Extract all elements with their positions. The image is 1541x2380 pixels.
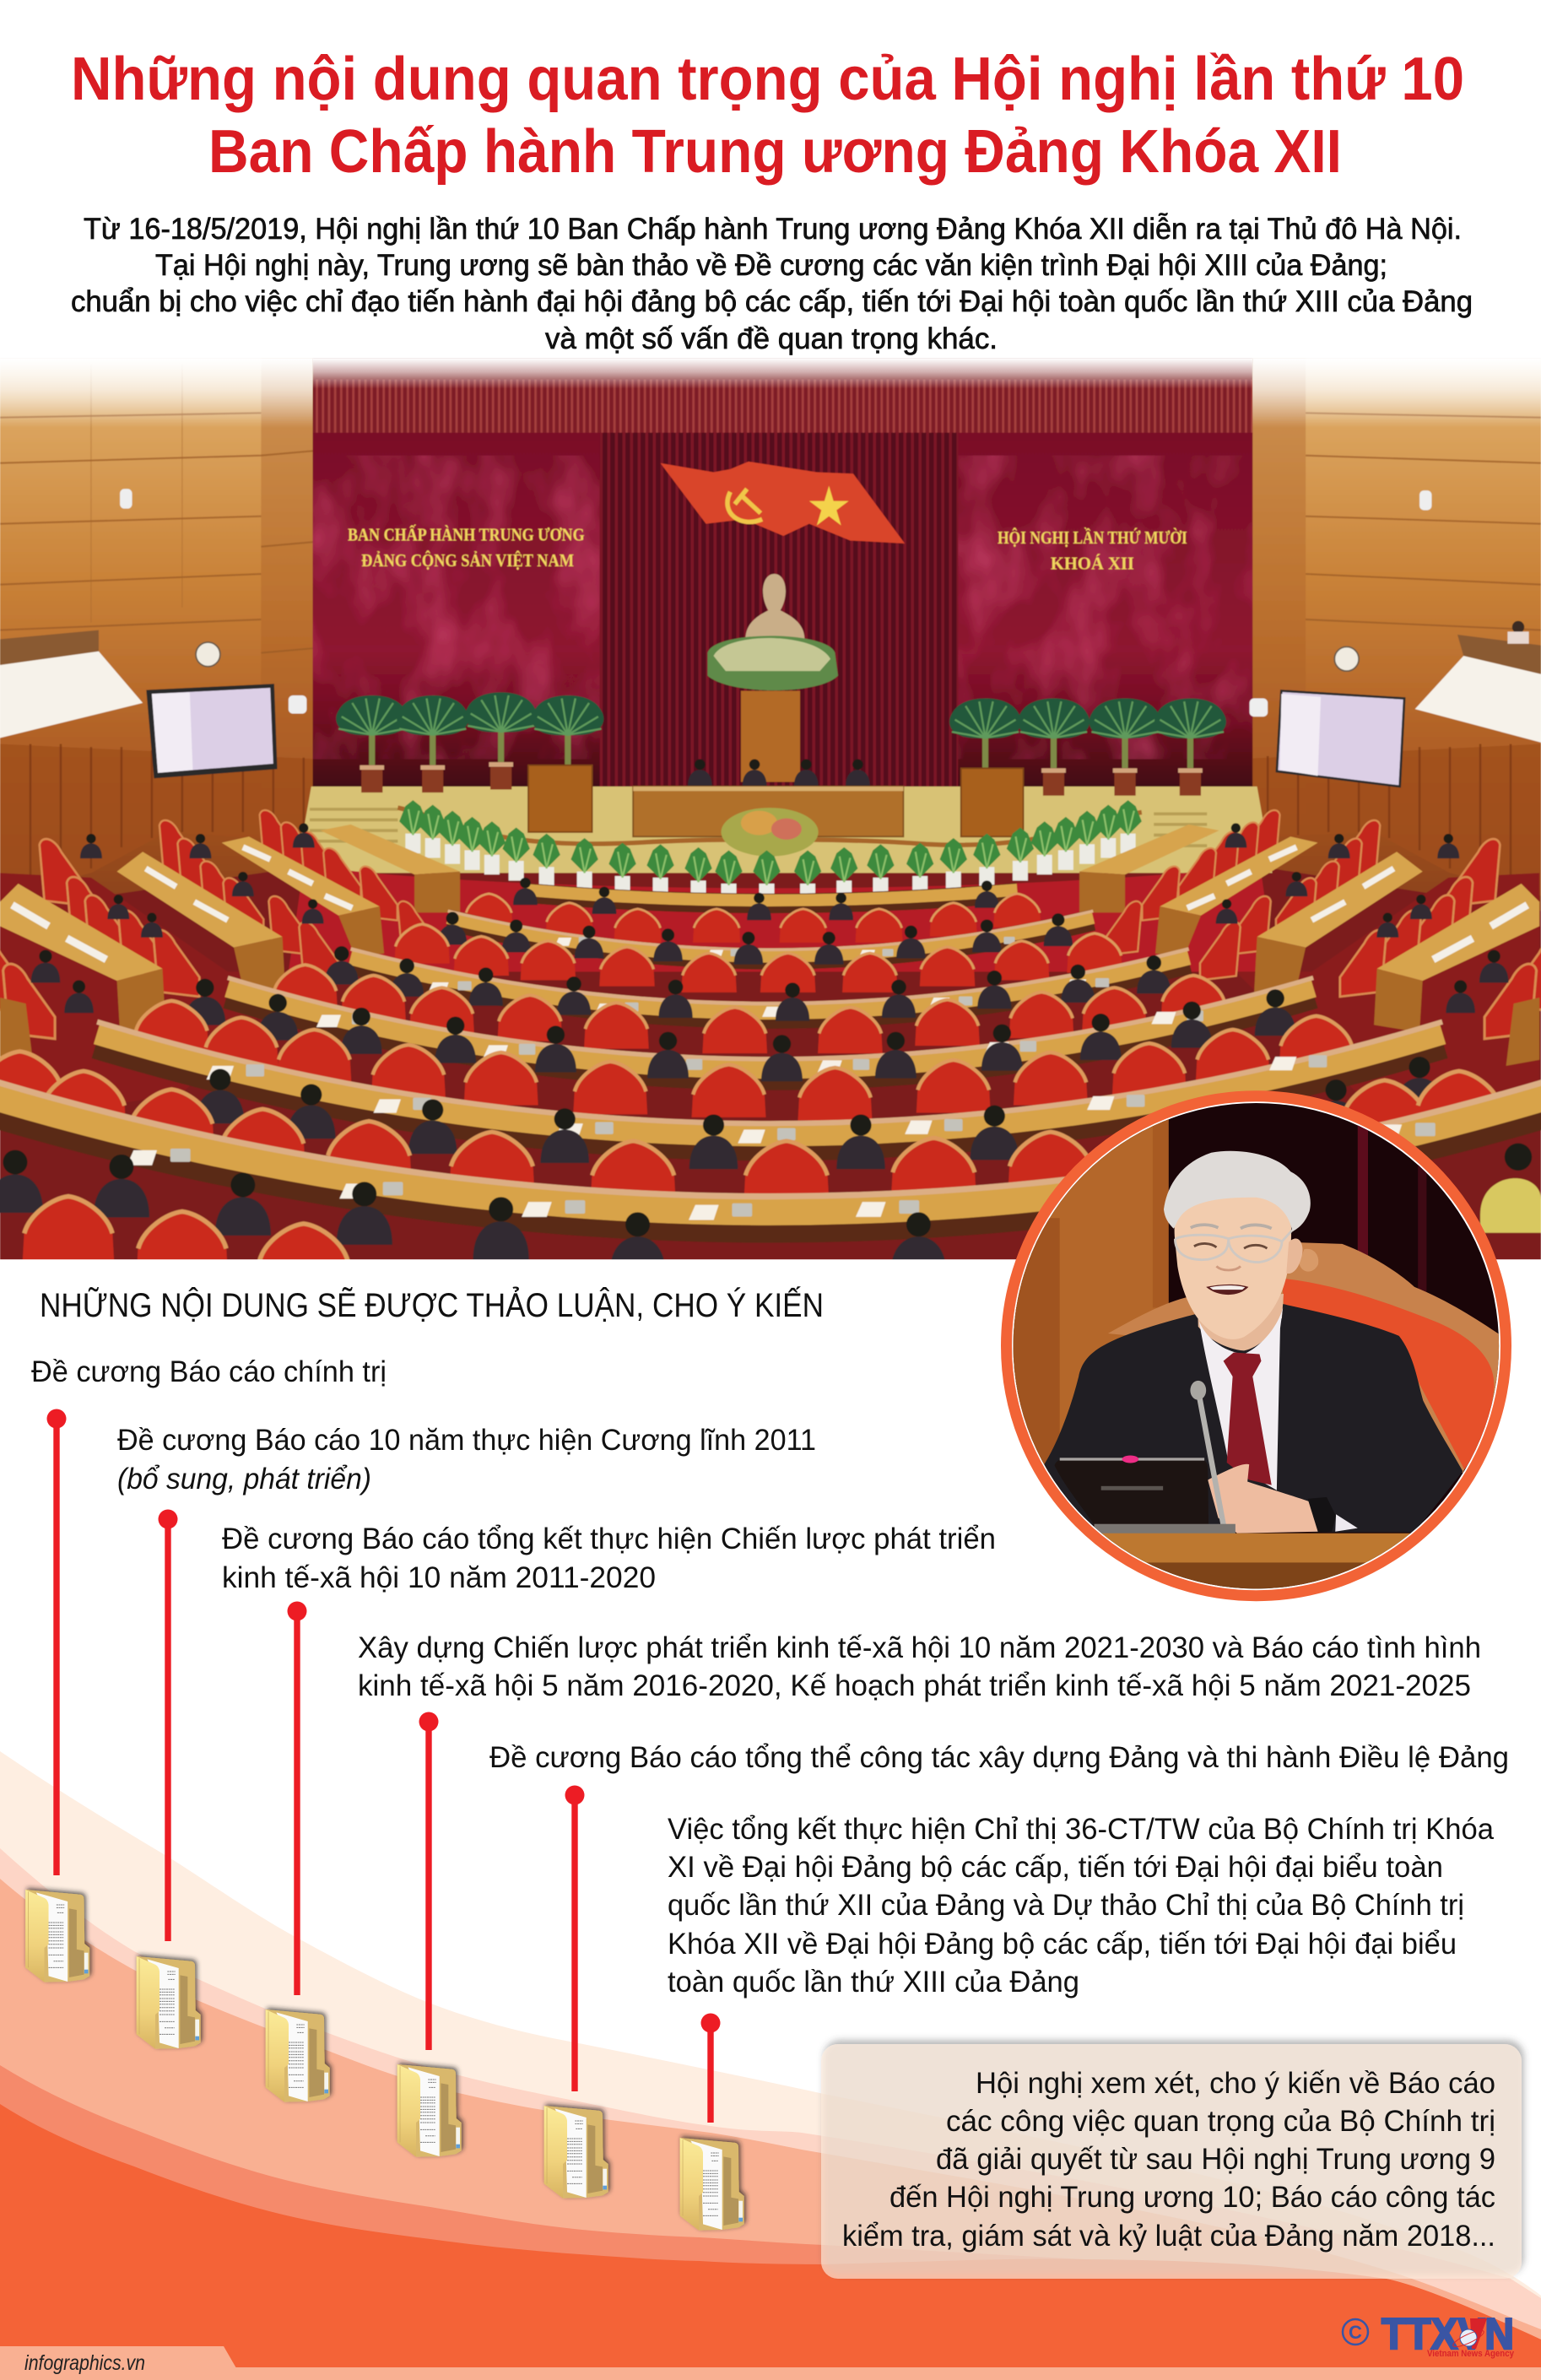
title: Những nội dung quan trọng của Hội nghị lần thứ 10: [71, 46, 1464, 113]
seating row 5: [0, 1022, 1501, 1202]
right velvet panel: [958, 433, 1252, 797]
item 1 text: Đề cương Báo cáo chính trị: [31, 1355, 387, 1388]
item 6 text: Việc tổng kết thực hiện Chỉ thị 36-CT/TW của Bộ Chính trị Khóa: [668, 1813, 1495, 1846]
intro text: chuẩn bị cho việc chỉ đạo tiến hành đại hội đảng bộ các cấp, tiến tới Đại hội toàn quốc lần thứ XIII của Đảng: [71, 285, 1473, 318]
item 3 text: Đề cương Báo cáo tổng kết thực hiện Chiến lược phát triển: [222, 1523, 996, 1555]
intro text: [71, 213, 1473, 355]
folder icon 4: [397, 2064, 462, 2157]
top valance curtain: [313, 380, 1252, 435]
item 6 text: quốc lần thứ XII của Đảng và Dự thảo Chỉ thị của Bộ Chính trị: [668, 1889, 1464, 1922]
item 4 text: kinh tế-xã hội 5 năm 2016-2020, Kế hoạch phát triển kinh tế-xã hội 5 năm 2021-2025: [358, 1669, 1471, 1702]
item 5 text: Đề cương Báo cáo tổng thể công tác xây dựng Đảng và thi hành Điều lệ Đảng: [489, 1741, 1509, 1774]
seating row 6: [0, 1064, 1541, 1289]
left banner text: [348, 524, 585, 571]
footer tab: [0, 2346, 236, 2375]
item 2 text: [117, 1424, 816, 1496]
callout box: đến Hội nghị Trung ương 10; Báo cáo công tác: [889, 2181, 1495, 2214]
item 6 text: XI về Đại hội Đảng bộ các cấp, tiến tới Đại hội đại biểu toàn: [668, 1851, 1443, 1884]
title: [71, 46, 1464, 186]
balconies: [0, 621, 1541, 743]
flag: [661, 462, 905, 544]
title: Ban Chấp hành Trung ương Đảng Khóa XII: [208, 118, 1342, 186]
item 6 text: [668, 1813, 1495, 1999]
balustrade: [397, 808, 1142, 845]
left wood wall: [0, 359, 327, 911]
potted plant row: [399, 800, 1142, 903]
section heading: NHỮNG NỘI DUNG SẼ ĐƯỢC THẢO LUẬN, CHO Ý KIẾN: [40, 1285, 824, 1324]
logo: TTXVN: Vietnam News Agency: [1427, 2349, 1515, 2359]
carpet: [289, 865, 1275, 971]
folder icon 3: [266, 2009, 330, 2102]
podiums: [528, 765, 1024, 836]
item 6 text: Khóa XII về Đại hội Đảng bộ các cấp, tiến tới Đại hội đại biểu: [668, 1928, 1457, 1961]
seating row 2: [394, 911, 1122, 993]
callout box: các công việc quan trọng của Bộ Chính trị: [946, 2105, 1495, 2138]
left banner text: ĐẢNG CỘNG SẢN VIỆT NAM: [361, 550, 574, 571]
stage steps: [310, 809, 1207, 846]
presidium: [633, 760, 903, 836]
right banner text: HỘI NGHỊ LẦN THỨ MƯỜI: [998, 527, 1187, 548]
clocks and cameras: [120, 489, 1431, 717]
background waves: [0, 1751, 1541, 2380]
pin 4: [419, 1712, 439, 2050]
callout box: đã giải quyết từ sau Hội nghị Trung ương 9: [936, 2143, 1495, 2176]
folder icon 2: [137, 1956, 201, 2049]
pin 5: [565, 1786, 584, 2091]
logo: TTXVN: C: [1349, 2322, 1362, 2343]
intro text: và một số vấn đề quan trọng khác.: [545, 322, 998, 355]
pin 1: [47, 1409, 66, 1875]
central curtain: [600, 433, 958, 797]
portrait photo: [987, 1080, 1538, 1631]
right wood wall: [1237, 359, 1541, 911]
item 3 text: [222, 1523, 996, 1594]
left side seating blocks: [0, 810, 460, 1123]
velvet mottling: [313, 456, 1252, 760]
pin 6: [700, 2014, 721, 2123]
palms left: [336, 692, 603, 792]
intro text: Từ 16-18/5/2019, Hội nghị lần thứ 10 Ban Chấp hành Trung ương Đảng Khóa XII diễn ra tại Thủ đô Hà Nội.: [84, 213, 1462, 246]
right side seating blocks: [1079, 810, 1541, 1123]
pin 3: [287, 1602, 307, 1995]
right banner text: KHOÁ XII: [1051, 554, 1134, 574]
footer tab: infographics.vn: [24, 2351, 145, 2375]
screens: [148, 684, 1404, 787]
callout box: [821, 2044, 1522, 2279]
item 2 text: Đề cương Báo cáo 10 năm thực hiện Cương lĩnh 2011: [117, 1424, 816, 1457]
item 2 text: (bổ sung, phát triển): [117, 1463, 371, 1496]
hall base: [0, 359, 1541, 1260]
left velvet panel: [313, 433, 601, 797]
seating row 4: [134, 978, 1354, 1121]
folder icon 6: [680, 2138, 744, 2231]
seating row 1: [465, 878, 1041, 943]
top fade to white: [0, 359, 313, 428]
item 4 text: Xây dựng Chiến lược phát triển kinh tế-xã hội 10 năm 2021-2030 và Báo cáo tình hình: [358, 1631, 1481, 1664]
logo: TTXVN: TTXVN: [1381, 2310, 1514, 2359]
photo: plenary hall: [0, 359, 1541, 1289]
seating row 3: [273, 946, 1225, 1053]
left banner text: BAN CHẤP HÀNH TRUNG ƯƠNG: [348, 524, 585, 544]
intro text: Tại Hội nghị này, Trung ương sẽ bàn thảo về Đề cương các văn kiện trình Đại hội XIII của Đảng;: [155, 249, 1387, 282]
item 6 text: toàn quốc lần thứ XIII của Đảng: [668, 1966, 1079, 1999]
folder icon 5: [544, 2106, 608, 2199]
bust and pedestal: [707, 574, 838, 782]
portrait ring: [1006, 1096, 1506, 1596]
folder icon 1: [25, 1890, 89, 1982]
callout box: Hội nghị xem xét, cho ý kiến về Báo cáo: [976, 2067, 1495, 2100]
palms right: [949, 699, 1226, 796]
portrait medallion: [987, 1080, 1538, 1631]
pin 2: [159, 1509, 177, 1941]
flower bouquet: [722, 808, 819, 857]
item 3 text: kinh tế-xã hội 10 năm 2011-2020: [222, 1561, 656, 1594]
right banner text: [998, 527, 1187, 574]
item 4 text: [358, 1631, 1481, 1702]
callout box: kiểm tra, giám sát và kỷ luật của Đảng năm 2018...: [842, 2220, 1495, 2253]
stage floor: [296, 787, 1273, 873]
